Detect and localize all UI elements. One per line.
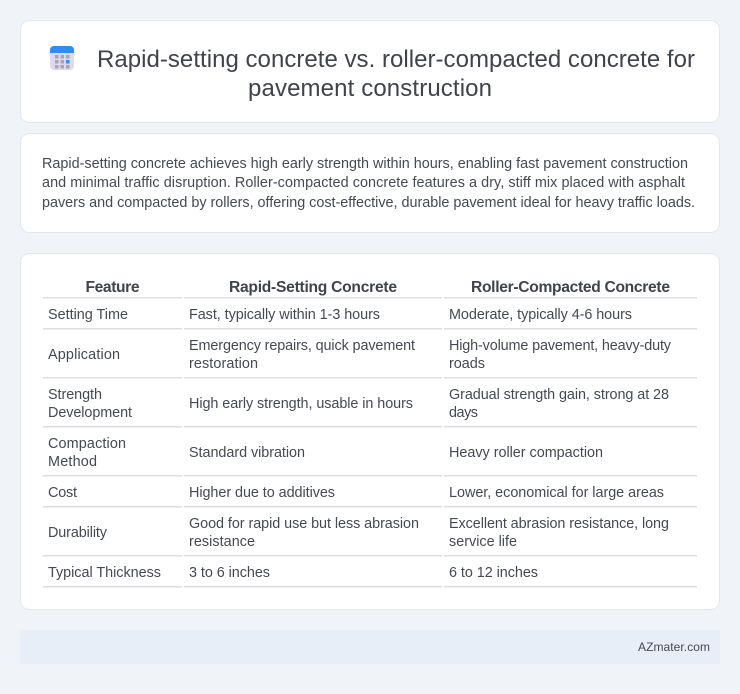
row: application: roads bbox=[449, 356, 485, 372]
row: application: Emergency repairs, quick pavement bbox=[189, 338, 415, 354]
panel: title card bbox=[20, 20, 720, 122]
row: cost: Higher due to additives bbox=[189, 485, 335, 501]
row: application: Application bbox=[48, 347, 120, 363]
row: compaction method: Compaction bbox=[48, 436, 126, 452]
row: setting time: Moderate, typically 4-6 hours bbox=[449, 307, 632, 323]
table header bbox=[86, 279, 670, 296]
row: durability: service life bbox=[449, 534, 517, 550]
row: durability: resistance bbox=[189, 534, 255, 550]
row: cost: Lower, economical for large areas bbox=[449, 485, 664, 501]
row: application: High-volume pavement, heavy-duty bbox=[449, 338, 672, 354]
title: Rapid-setting concrete vs. roller-compacted concrete for bbox=[97, 46, 695, 73]
row: strength development: Gradual strength gain, strong at 28 bbox=[449, 387, 669, 403]
description text bbox=[42, 156, 695, 211]
row: compaction method: Method bbox=[48, 454, 97, 470]
row: durability: Good for rapid use but less abrasion bbox=[189, 516, 419, 532]
table header: Feature bbox=[86, 279, 140, 296]
title bbox=[97, 46, 695, 102]
row: typical thickness: 6 to 12 inches bbox=[449, 565, 538, 581]
row: strength development bbox=[48, 387, 669, 421]
description text: and minimal traffic disruption. Roller-compacted concrete features a dry, stiff mix placed with asphalt bbox=[42, 175, 685, 191]
table header: Roller-Compacted Concrete bbox=[471, 279, 670, 296]
row: compaction method bbox=[48, 436, 603, 470]
footer bbox=[20, 630, 720, 664]
row: compaction method: Heavy roller compaction bbox=[449, 445, 603, 461]
row: strength development: High early strength, usable in hours bbox=[189, 396, 413, 412]
row: application bbox=[48, 338, 672, 372]
row: typical thickness bbox=[48, 565, 538, 581]
row: application: restoration bbox=[189, 356, 258, 372]
panel: comparison table bbox=[20, 254, 720, 610]
row: typical thickness: Typical Thickness bbox=[48, 565, 161, 581]
row: strength development: Development bbox=[48, 405, 132, 421]
footer credit: AZmater.com bbox=[638, 640, 710, 654]
description text: pavers and compacted by rollers, offering cost-effective, durable pavement ideal for heavy traffic loads. bbox=[42, 195, 695, 211]
row: strength development: Strength bbox=[48, 387, 102, 403]
row: typical thickness: 3 to 6 inches bbox=[189, 565, 270, 581]
row: setting time: Setting Time bbox=[48, 307, 128, 323]
icon: calendar bbox=[50, 46, 74, 70]
row: durability: Durability bbox=[48, 525, 108, 541]
row: setting time bbox=[48, 307, 632, 323]
row: cost: Cost bbox=[48, 485, 77, 501]
row: strength development: days bbox=[449, 405, 478, 421]
row: durability: Excellent abrasion resistance, long bbox=[449, 516, 669, 532]
title: pavement construction bbox=[248, 75, 492, 102]
row: durability bbox=[48, 516, 669, 550]
row: setting time: Fast, typically within 1-3 hours bbox=[189, 307, 380, 323]
description text: Rapid-setting concrete achieves high early strength within hours, enabling fast pavement construction bbox=[42, 156, 688, 172]
panel: description bbox=[20, 134, 720, 232]
row: cost bbox=[48, 485, 664, 501]
table header: Rapid-Setting Concrete bbox=[229, 279, 397, 296]
row: compaction method: Standard vibration bbox=[189, 445, 305, 461]
